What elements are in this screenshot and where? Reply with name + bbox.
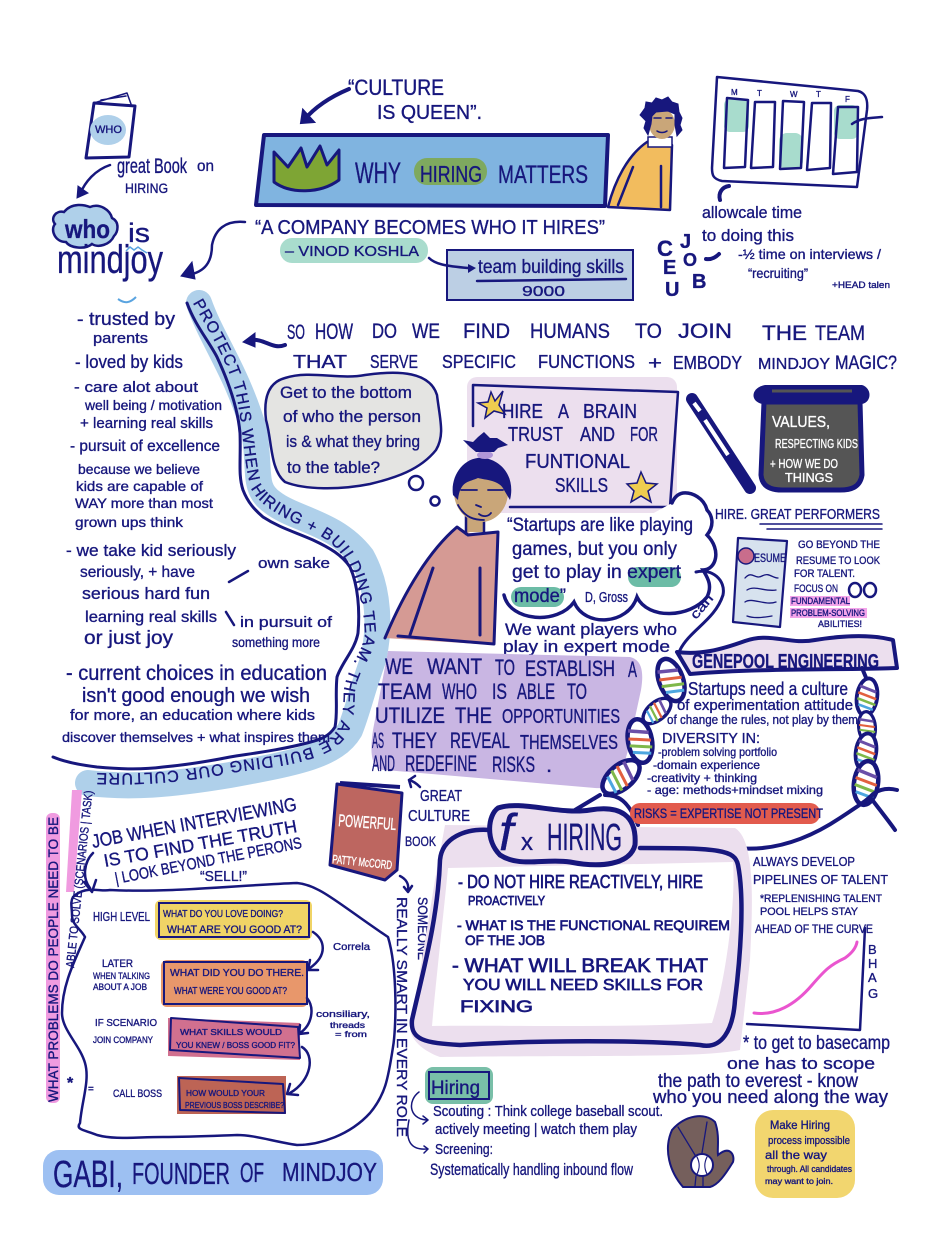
list: what mindjoy is: + learning real skills <box>80 415 213 432</box>
panel heading <box>502 401 658 497</box>
highlighted time blocks <box>724 99 858 169</box>
panel: establish a team: REDEFINE <box>405 751 477 776</box>
note: great culture book: BOOK <box>405 833 436 849</box>
heading: “SELL!” <box>200 868 247 885</box>
arrow to calendar <box>719 186 729 200</box>
headline question: FIND <box>463 320 510 343</box>
panel: establish a team: TEAM <box>378 679 432 704</box>
headline question: THE <box>762 322 807 345</box>
vertical note: someone really smart in every role <box>393 876 431 1137</box>
row: call boss: PREVIOUS BOSS DESCRIBE? <box>185 1101 284 1110</box>
title: f <box>499 804 518 862</box>
cloud text <box>507 515 693 607</box>
panel: establish a team: THEMSELVES <box>520 732 618 754</box>
icon: baseball glove <box>668 1116 733 1187</box>
cloud text: mode” <box>514 586 566 607</box>
headline question: SERVE <box>370 352 418 372</box>
notes: scouting and screening: actively meeting | watch them play <box>435 1121 637 1138</box>
list: what mindjoy is: well being / motivation <box>84 397 222 413</box>
genepool text: Startups need a culture <box>688 679 848 699</box>
note: make hiring process impossible: may want to join. <box>765 1177 833 1186</box>
genepool text: -domain experience <box>653 758 760 772</box>
row: high level <box>93 900 312 940</box>
outline <box>62 883 395 1145</box>
note: to get to basecamp <box>652 1033 890 1107</box>
note: go beyond the resume: PROBLEM-SOLVING <box>791 608 865 618</box>
note: make hiring process impossible: all the way <box>765 1148 827 1162</box>
headline question: FUNCTIONS <box>538 352 635 372</box>
note: great culture book <box>405 776 470 849</box>
note: always develop pipelines <box>753 854 888 936</box>
chart: bhag growth curve <box>747 928 878 1030</box>
title banner <box>256 135 608 206</box>
note: always develop pipelines: *REPLENISHING TALENT <box>760 893 882 905</box>
list: what mindjoy is: or just joy <box>84 628 174 649</box>
chart: bhag growth curve: B <box>868 942 877 957</box>
list: what mindjoy is: because we believe <box>78 461 200 477</box>
list: what mindjoy is: grown ups think <box>75 514 184 530</box>
logo: who is mindjoy: who <box>64 214 110 244</box>
list: what mindjoy is: - care alot about <box>74 379 199 396</box>
book: powerful <box>330 783 402 880</box>
banner title text: WHY <box>355 157 401 190</box>
callout: risks = expertise not present: RISKS = EXPERTISE NOT PRESENT <box>634 805 823 821</box>
note: players who can play in expert mode: play in expert mode <box>503 637 670 656</box>
letters: ceo job: J <box>680 231 691 253</box>
headline question: + <box>648 353 662 373</box>
highlight: expert mode <box>511 567 681 607</box>
note: always develop pipelines: POOL HELPS STAY <box>760 906 859 918</box>
headline question: SO <box>287 321 305 344</box>
list: what mindjoy is: for more, an education where kids <box>70 707 315 724</box>
logo: who is mindjoy: is <box>128 218 150 248</box>
genepool text: of change the rules, not play by them <box>667 712 858 727</box>
row: call boss: * <box>67 1075 74 1092</box>
headline question: TO <box>635 320 662 343</box>
note: great book on hiring: HIRING <box>125 180 168 196</box>
divider line left of banner <box>53 303 359 769</box>
note: allocate time <box>702 203 890 290</box>
chart: bhag growth curve: A <box>868 970 877 985</box>
note: players who can play in expert mode <box>503 571 723 656</box>
note: make hiring process impossible: process impossible <box>768 1135 850 1147</box>
side notes <box>226 555 333 650</box>
chart: bhag growth curve: G <box>868 986 878 1001</box>
banner: gabi, founder of mindjoy: GABI, <box>53 1154 123 1196</box>
callout: culture is queen: “CULTURE <box>348 75 444 100</box>
pot text: VALUES, <box>772 414 830 431</box>
panel: establish a team: THE <box>455 703 492 728</box>
list: what mindjoy is: - trusted by <box>77 309 175 329</box>
note: allocate time: allowcale time <box>702 203 802 222</box>
river banner: protect this when hiring <box>51 290 390 798</box>
panel: establish a team: UTILIZE <box>375 703 445 728</box>
row: high level: WHAT DO YOU LOVE DOING? <box>163 909 283 920</box>
note: go beyond the resume: FUNDAMENTAL <box>791 596 850 606</box>
thought bubble: get to the bottom: Get to the bottom <box>280 383 412 402</box>
connector curve from genepool to fx hiring <box>736 789 897 849</box>
panel: establish a team: TO <box>495 655 515 680</box>
note: great book on hiring: great Book <box>117 155 187 178</box>
genepool text: -creativity + thinking <box>647 771 757 785</box>
banner: gabi, founder of mindjoy: MINDJOY <box>282 1157 377 1187</box>
icon: crown <box>274 146 339 191</box>
headline question: SPECIFIC <box>442 352 516 372</box>
heading: IS TO FIND THE TRUTH <box>102 816 299 871</box>
row: if scenario <box>93 1018 300 1060</box>
panel: establish a team: ESTABLISH <box>525 656 615 681</box>
panel heading: SKILLS <box>555 475 608 497</box>
letters: ceo job: C <box>657 236 673 261</box>
chart: bhag growth curve: H <box>868 956 877 971</box>
pot text: RESPECTING KIDS <box>775 436 858 451</box>
panel: establish a team: OPPORTUNITIES <box>502 706 620 728</box>
book: powerful: PATTY McCORD <box>332 852 393 872</box>
note: go beyond the resume: GO BEYOND THE <box>798 539 880 551</box>
book: who: WHO <box>95 124 122 136</box>
panel heading: AND <box>580 424 615 446</box>
row: call boss: = <box>88 1084 94 1095</box>
vertical note: what problems: WHAT PROBLEMS DO PEOPLE NEED TO BE <box>45 817 61 1102</box>
panel: establish a team: TO <box>567 679 587 704</box>
side notes: in pursuit of <box>240 614 333 631</box>
note: to get to basecamp: the path to everest - know <box>658 1071 858 1092</box>
pink highlights <box>790 596 867 618</box>
icon: pen <box>692 399 750 488</box>
title <box>499 804 622 862</box>
list: what mindjoy is <box>62 309 333 745</box>
headline question: HUMANS <box>530 320 610 343</box>
headline question <box>243 319 897 374</box>
row: if scenario: IF SCENARIO <box>95 1018 157 1029</box>
panel heading: FOR <box>630 424 658 446</box>
title blob <box>490 806 635 865</box>
pot text: THINGS <box>785 470 833 485</box>
row: call boss: HOW WOULD YOUR <box>186 1089 265 1098</box>
note: allocate time: “recruiting” <box>748 265 808 281</box>
list: what mindjoy is: - pursuit of excellence <box>70 438 220 455</box>
headline question: WE <box>412 320 440 343</box>
text: - WHAT WILL BREAK THAT <box>452 956 708 977</box>
note: make hiring process impossible: Make Hiring <box>770 1118 830 1132</box>
icon: resume document: ESUME <box>754 551 786 565</box>
panel heading: FUNTIONAL <box>525 451 630 473</box>
icon: pot of values <box>753 385 870 490</box>
book: who <box>86 93 135 158</box>
letters: ceo job: U <box>665 279 679 301</box>
week day columns: T <box>757 89 762 98</box>
notes: scouting and screening: Screening: <box>435 1141 493 1158</box>
thought bubble: get to the bottom: to the table? <box>287 458 380 477</box>
note: to get to basecamp: one has to scope <box>727 1054 875 1073</box>
thought bubble: get to the bottom: is & what they bring <box>286 432 420 451</box>
vertical note: what problems <box>45 790 96 1103</box>
row: later: LATER <box>102 958 133 970</box>
letters: ceo job <box>657 231 706 301</box>
note: great book on hiring <box>77 155 214 198</box>
character: woman in orange sweater <box>608 97 682 210</box>
flow arrows and notes: Correla <box>333 942 370 953</box>
week day columns: W <box>790 90 798 99</box>
vertical note: someone really smart in every role: SOMEONE <box>415 897 431 960</box>
panel: establish a team: THEY <box>392 728 437 753</box>
list: what mindjoy is: seriously, + have <box>80 564 195 581</box>
logo: who is mindjoy: mindjoy <box>57 238 163 282</box>
panel: establish a team: WHO <box>442 679 477 704</box>
genepool text: of experimentation attitude <box>677 697 853 714</box>
highlight: hiring <box>414 158 487 185</box>
note: allocate time: -½ time on interviews / <box>738 246 881 262</box>
quote: a company becomes who it hires <box>181 217 605 279</box>
note: to get to basecamp: who you need along the way <box>652 1087 888 1107</box>
thought bubble: get to the bottom <box>265 373 441 506</box>
text: - DO NOT HIRE REACTIVELY, HIRE <box>458 872 703 892</box>
note: allocate time: to doing this <box>702 226 794 245</box>
notes: scouting and screening <box>408 1092 663 1179</box>
list: what mindjoy is: learning real skills <box>85 609 217 626</box>
panel heading: BRAIN <box>583 401 637 423</box>
row: later: WHAT DID YOU DO THERE. <box>170 968 304 979</box>
letters: ceo job: E <box>663 257 676 279</box>
panel: genepool engineering <box>575 636 897 825</box>
genepool text <box>647 679 858 797</box>
list: what mindjoy is: WAY more than most <box>75 495 213 511</box>
panel: job when interviewing <box>62 794 395 1145</box>
panel: fx hiring <box>410 804 752 1057</box>
heading: JOB WHEN INTERVIEWING <box>90 794 298 853</box>
row: later: WHAT WERE YOU GOOD AT? <box>174 986 287 997</box>
callout: culture is queen: IS QUEEN”. <box>377 102 482 124</box>
text <box>452 872 730 1016</box>
note: make hiring process impossible: through. All candidates <box>767 1164 852 1174</box>
row: later <box>93 958 308 1007</box>
banner <box>677 636 897 674</box>
row: later: WHEN TALKING <box>93 971 150 981</box>
panel: establish a team: ABLE <box>517 679 555 704</box>
arrow <box>84 853 96 892</box>
panel: establish a team: A <box>628 657 637 682</box>
callout: culture is queen <box>301 75 482 124</box>
row: if scenario: YOU KNEW / BOSS GOOD FIT? <box>176 1041 296 1050</box>
vertical note: someone really smart in every role: REALLY SMART IN EVERY ROLE <box>393 897 410 1137</box>
list: what mindjoy is: - we take kid seriously <box>66 541 237 560</box>
character: gabi <box>385 432 511 645</box>
letters: ceo job: B <box>692 271 706 293</box>
note: great culture book: CULTURE <box>408 808 470 825</box>
week day columns: M <box>731 88 738 97</box>
banner: gabi, founder of mindjoy: FOUNDER <box>132 1156 230 1191</box>
note: always develop pipelines: AHEAD OF THE CURVE <box>755 922 873 936</box>
text: FIXING <box>460 997 533 1016</box>
side notes: something more <box>232 634 320 650</box>
note: go beyond the resume: FOR TALENT. <box>794 568 855 580</box>
note: go beyond the resume: FOCUS ON <box>794 583 838 595</box>
logo: who is mindjoy <box>53 205 163 302</box>
heading: | LOOK BEYOND THE PERONS <box>114 835 303 888</box>
headline question: MAGIC? <box>835 353 897 374</box>
genepool text: - age: methods+mindset mixing <box>647 783 823 797</box>
headline question: TEAM <box>815 322 865 345</box>
row: if scenario: JOIN COMPANY <box>93 1035 153 1045</box>
dna helix left <box>575 655 690 825</box>
quote: a company becomes who it hires: “A COMPANY BECOMES WHO IT HIRES” <box>255 217 605 239</box>
callout: risks = expertise not present <box>630 803 823 824</box>
cloud text: get to play in expert <box>512 562 682 583</box>
box: team building skills: team building skills <box>478 257 624 278</box>
row: if scenario: WHAT SKILLS WOULD <box>180 1028 282 1037</box>
row: call boss: CALL BOSS <box>113 1088 162 1100</box>
banner text along the curve: PROTECT THIS WHEN HIRING + BUILDING TEAM. THEY ARE BUILDING OUR CULTURE <box>97 298 376 785</box>
vertical note: what problems: ABLE TO SOLVE (SCENARIOS | TASK) <box>63 790 96 968</box>
text: PROACTIVELY <box>468 893 545 908</box>
banner title text: HIRING <box>420 161 482 187</box>
note: go beyond the resume: RESUME TO LOOK <box>796 555 881 567</box>
list: what mindjoy is: isn't good enough we wish <box>82 685 310 707</box>
banner title text: MATTERS <box>498 161 588 189</box>
headline question: HOW <box>315 319 353 344</box>
icon: star <box>478 391 505 418</box>
text: - WHAT IS THE FUNCTIONAL REQUIREM <box>457 917 730 933</box>
note: always develop pipelines: PIPELINES OF TALENT <box>753 872 888 887</box>
note: allocate time: +HEAD talen <box>832 280 890 290</box>
thought bubble: get to the bottom: of who the person <box>283 407 421 426</box>
panel: establish a team: . <box>546 752 552 777</box>
week day columns: T <box>816 90 821 99</box>
cloud text: “Startups are like playing <box>507 515 693 536</box>
note: go beyond the resume: ABILITIES! <box>818 619 862 629</box>
banner: gabi, founder of mindjoy <box>43 1150 383 1196</box>
row: later: ABOUT A JOB <box>93 982 147 992</box>
panel: establish a team: IS <box>492 679 507 704</box>
headline question: MINDJOY <box>758 356 830 373</box>
dna helix right <box>851 668 881 806</box>
heading <box>90 794 303 888</box>
panel: establish a team: REVEAL <box>450 728 510 753</box>
flow arrows and notes: consiliary, <box>316 1009 370 1019</box>
pot text <box>770 414 858 485</box>
panel: establish a team: AND <box>372 751 395 776</box>
note: great culture book: GREAT <box>420 788 462 805</box>
speech cloud: startups quote <box>504 493 716 620</box>
row: call boss <box>67 1075 286 1114</box>
box: team building skills <box>429 250 633 300</box>
genepool text: DIVERSITY IN: <box>662 730 760 747</box>
genepool text: -problem solving portfolio <box>658 745 777 759</box>
panel heading: A <box>558 401 570 423</box>
flow arrows and notes: threads <box>330 1021 365 1030</box>
row: high level: HIGH LEVEL <box>93 909 150 924</box>
panel heading: HIRE <box>502 401 543 423</box>
title: HIRING <box>547 817 622 859</box>
cloud text: D, Gross <box>585 589 628 606</box>
quote: a company becomes who it hires: – VINOD KOSHLA <box>285 243 419 260</box>
panel: establish a team: WANT <box>427 654 482 679</box>
list: what mindjoy is: kids are capable of <box>76 478 203 494</box>
book: powerful: POWERFUL <box>338 811 397 834</box>
note: hire great performers <box>715 506 882 529</box>
letters: ceo job: O <box>683 250 697 270</box>
list: what mindjoy is: serious hard fun <box>82 584 210 603</box>
note: hire great performers: HIRE. GREAT PERFORMERS <box>715 506 880 523</box>
note: go beyond the resume <box>790 539 881 629</box>
list: what mindjoy is: - current choices in education <box>66 662 327 685</box>
list: what mindjoy is: discover themselves + what inspires them <box>62 729 330 745</box>
note: great book on hiring: on <box>197 158 214 175</box>
row: high level: WHAT ARE YOU GOOD AT? <box>167 924 302 936</box>
flow arrows and notes: = from <box>335 1030 367 1039</box>
headline question: DO <box>372 320 397 343</box>
icon: resume document <box>733 538 787 627</box>
banner title text <box>355 157 588 190</box>
cloud text: games, but you only <box>512 539 677 560</box>
week day columns: F <box>845 95 850 104</box>
note: always develop pipelines: ALWAYS DEVELOP <box>753 854 855 869</box>
panel heading: TRUST <box>508 424 563 446</box>
calendar of the week <box>712 77 882 187</box>
headline question: EMBODY <box>673 353 742 373</box>
flow arrows and notes <box>287 932 370 1095</box>
note: players who can play in expert mode: can <box>687 591 716 622</box>
panel: hire a brain trust <box>467 377 678 513</box>
headline question: JOIN <box>678 320 732 343</box>
note: to get to basecamp: * to get to basecamp <box>743 1033 890 1054</box>
side notes: own sake <box>258 555 330 572</box>
list: what mindjoy is: - loved by kids <box>75 352 183 372</box>
title: x <box>521 829 533 856</box>
list: what mindjoy is: parents <box>93 330 148 347</box>
headline question: THAT <box>293 352 347 372</box>
note: make hiring process impossible <box>755 1110 855 1198</box>
week day columns <box>724 88 882 174</box>
banner: gabi, founder of mindjoy: OF <box>240 1157 264 1188</box>
panel: establish a team: AS <box>372 728 384 753</box>
panel: establish a team: RISKS <box>492 752 535 777</box>
note: players who can play in expert mode: We want players who <box>505 620 677 639</box>
notes: scouting and screening: Systematically handling inbound flow <box>430 1160 634 1179</box>
pot text: + HOW WE DO <box>770 456 838 471</box>
tag: hiring: Hiring <box>431 1078 480 1099</box>
box: team building skills: 9000 <box>522 283 565 300</box>
icon: star <box>627 472 657 502</box>
text: YOU WILL NEED SKILLS FOR <box>463 977 703 994</box>
notes: scouting and screening: Scouting : Think college baseball scout. <box>433 1103 663 1120</box>
panel: establish a team <box>371 651 642 788</box>
text: OF THE JOB <box>465 932 545 948</box>
panel: establish a team: WE <box>385 654 413 679</box>
tag: hiring <box>425 1067 493 1104</box>
